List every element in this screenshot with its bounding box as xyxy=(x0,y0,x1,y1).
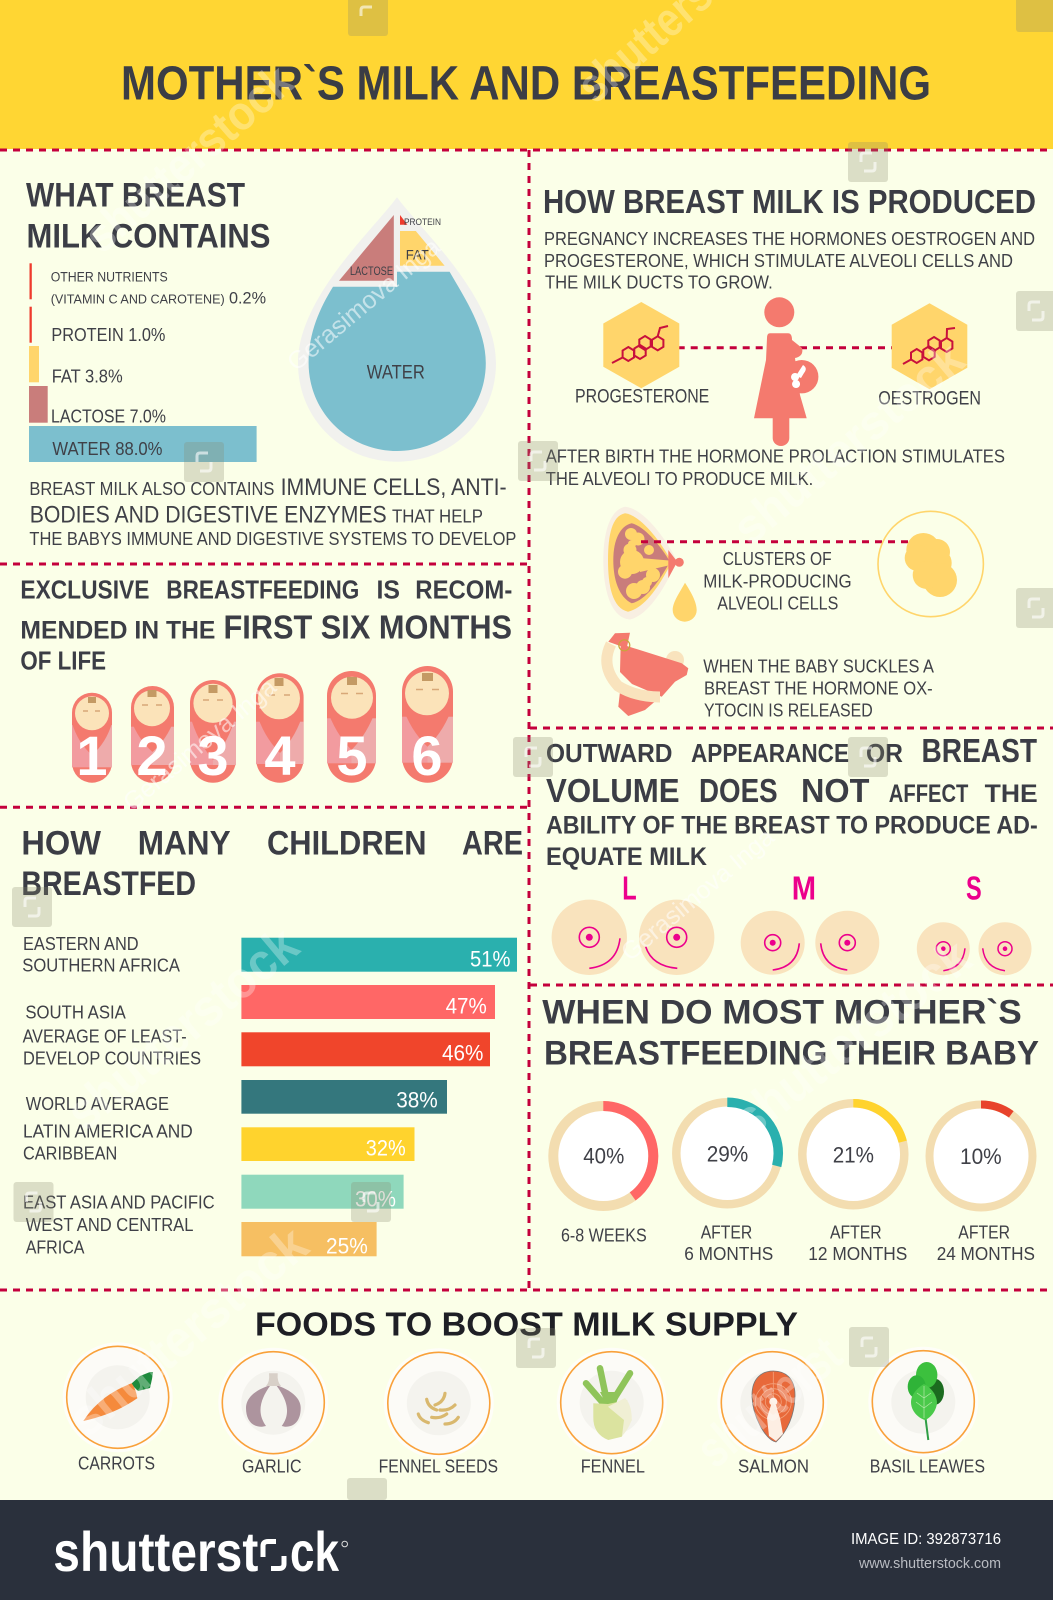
region labels: EASTERN AND xyxy=(23,934,139,954)
icon: fennel seeds: FENNEL SEEDS xyxy=(379,1457,498,1477)
watermark overlay: Gerasimova Inga xyxy=(282,233,446,377)
text block: prolactin: THE ALVEOLI TO PRODUCE MILK. xyxy=(546,468,813,489)
watermark overlay: shutterstock xyxy=(57,1215,319,1448)
icon: baby month 4 xyxy=(256,673,304,787)
heading: outward appearance: VOLUME xyxy=(546,772,680,809)
panel: when do most mothers breastfeed xyxy=(542,993,1039,1264)
donut: 29%: 29% xyxy=(707,1142,748,1167)
panel: breast volume xyxy=(546,732,1038,975)
bar chart: composition: LACTOSE 7.0% xyxy=(51,406,166,426)
donut: 21% xyxy=(802,1103,907,1264)
heading: when do most mothers xyxy=(542,993,1039,1072)
heading: outward appearance: APPEARANCE xyxy=(691,738,849,768)
icon: pregnant woman xyxy=(754,297,818,446)
heading: foods: FOODS TO BOOST MILK SUPPLY xyxy=(255,1306,798,1343)
text block: clusters of alveoli cells: CLUSTERS OF xyxy=(723,548,832,569)
donut: 10% xyxy=(930,1104,1035,1264)
text block: clusters of alveoli cells: MILK-PRODUCING xyxy=(703,570,852,591)
region labels: LATIN AMERICA AND xyxy=(23,1122,193,1142)
heading: when do most mothers: WHEN DO MOST MOTHER`S xyxy=(542,993,1022,1031)
donut: 10%: 24 MONTHS xyxy=(937,1244,1035,1264)
icon: breast cross-section with drop xyxy=(603,507,697,622)
heading: exclusive breastfeeding: MENDED IN THE xyxy=(20,616,215,644)
donut: 40% xyxy=(553,1106,653,1246)
bar chart: breastfed children: 38% xyxy=(396,1087,438,1112)
watermark overlay: shutterstock xyxy=(55,916,310,1142)
donut: 29%: 6 MONTHS xyxy=(684,1244,773,1264)
region labels: EAST ASIA AND PACIFIC xyxy=(23,1192,215,1212)
heading: what breast milk contains: MILK CONTAINS xyxy=(26,217,270,255)
size M xyxy=(741,869,879,975)
icon: carrots xyxy=(63,1342,173,1473)
icon: baby month 4: 4 xyxy=(264,724,296,787)
text block: oxytocin: YTOCIN IS RELEASED xyxy=(704,700,873,721)
text block: pregnancy hormones: THE MILK DUCTS TO GROW. xyxy=(545,271,773,292)
donut: 21%: 21% xyxy=(833,1143,874,1168)
donut: 10%: AFTER xyxy=(958,1222,1010,1242)
text block: immune cells note: THE BABYS IMMUNE AND DIGESTIVE SYSTEMS TO DEVELOP xyxy=(29,528,516,549)
watermark overlay: Gerasimova Inga xyxy=(118,673,282,817)
icon: basil xyxy=(868,1347,985,1477)
heading: outward appearance: THE xyxy=(985,780,1038,808)
heading: how many children: ARE xyxy=(462,824,523,862)
heading: how many children xyxy=(21,824,523,903)
chart: milk drop xyxy=(298,197,496,462)
bar chart: composition: 0.2% xyxy=(229,288,266,307)
text block: pregnancy hormones: PROGESTERONE, WHICH STIMULATE ALVEOLI CELLS AND xyxy=(544,250,1013,271)
panel: how breast milk is produced xyxy=(543,183,1036,721)
heading: outward appearance: OUTWARD xyxy=(546,738,672,768)
icon: progesterone hexagon xyxy=(603,302,679,388)
region labels: CARIBBEAN xyxy=(23,1143,117,1163)
text block: clusters of alveoli cells: ALVEOLI CELLS xyxy=(717,592,838,613)
icon: alveoli cluster xyxy=(878,511,983,617)
icon: salmon xyxy=(717,1348,827,1477)
heading: outward appearance: DOES xyxy=(699,772,778,809)
icon: baby month 6 xyxy=(402,666,453,787)
hormone labels: OESTROGEN xyxy=(878,388,981,409)
region labels: SOUTH ASIA xyxy=(25,1002,126,1022)
heading: exclusive breastfeeding: BREASTFEEDING xyxy=(166,574,359,604)
hormone labels: PROGESTERONE xyxy=(575,387,709,408)
icon: baby month 5 xyxy=(327,671,376,787)
panel: how many children are breastfed xyxy=(21,824,523,1258)
donut: 10%: 10% xyxy=(960,1144,1002,1169)
region labels: AVERAGE OF LEAST- xyxy=(23,1027,187,1047)
icon: garlic xyxy=(218,1348,328,1477)
icon: garlic: GARLIC xyxy=(242,1457,302,1477)
watermark overlay: shutterstock xyxy=(723,332,975,555)
header banner xyxy=(0,0,1053,149)
bar chart: composition xyxy=(29,263,266,462)
heading: exclusive breastfeeding: EXCLUSIVE xyxy=(20,574,149,604)
text block: prolactin xyxy=(546,446,1005,489)
panel: exclusive breastfeeding xyxy=(20,574,512,787)
heading: how many children: HOW xyxy=(21,824,102,862)
chart: milk drop: LACTOSE xyxy=(350,264,393,278)
icon: suckling breast xyxy=(607,633,688,716)
website: www.shutterstock.com xyxy=(858,1556,1001,1572)
footer logo: ck xyxy=(290,1520,340,1583)
heading: how many children: BREASTFED xyxy=(21,865,196,903)
heading: outward appearance: NOT xyxy=(801,772,869,809)
watermark overlay: shutterst xyxy=(685,1325,853,1479)
icon: baby month 5: 5 xyxy=(336,724,368,787)
bar chart: breastfed children: 32% xyxy=(366,1136,406,1161)
footer bar xyxy=(0,1500,1053,1600)
heading: what breast milk contains: WHAT BREAST xyxy=(26,177,245,215)
region labels: AFRICA xyxy=(26,1237,84,1257)
text block: clusters of alveoli cells xyxy=(703,548,852,613)
icon: baby month 1: 1 xyxy=(76,724,108,787)
heading: outward appearance: AFFECT xyxy=(889,780,968,808)
chart: milk drop: FAT xyxy=(406,246,429,262)
text block: oxytocin xyxy=(703,656,935,721)
heading: outward appearance xyxy=(546,732,1038,871)
text block: immune cells note: BREAST MILK ALSO CONTAINS xyxy=(29,479,274,499)
icon: baby month 2 xyxy=(131,686,174,787)
heading: outward appearance: EQUATE MILK xyxy=(546,843,707,871)
donut: 21%: 12 MONTHS xyxy=(808,1244,907,1264)
text block: immune cells note xyxy=(29,474,516,549)
heading: what breast milk contains xyxy=(26,177,270,255)
bar chart: breastfed children xyxy=(241,938,517,1258)
bar chart: breastfed children: 46% xyxy=(442,1041,483,1066)
text block: oxytocin: BREAST THE HORMONE OX- xyxy=(704,677,933,698)
image id: IMAGE ID: 392873716 xyxy=(851,1531,1001,1548)
donut: 40%: 6-8 WEEKS xyxy=(561,1226,647,1246)
chart: milk drop: WATER xyxy=(367,362,425,383)
icon: baby month 2: 2 xyxy=(136,724,168,787)
footer logo: shutterst xyxy=(53,1520,258,1583)
heading: exclusive breastfeeding: FIRST SIX MONTHS xyxy=(224,608,512,646)
icon: salmon: SALMON xyxy=(738,1457,809,1477)
bar chart: composition: WATER 88.0% xyxy=(52,439,162,459)
region labels: DEVELOP COUNTRIES xyxy=(23,1048,201,1068)
icon: carrots: CARROTS xyxy=(78,1453,155,1473)
size S: S xyxy=(966,869,982,906)
chart: milk drop: PROTEIN xyxy=(404,217,441,227)
text block: pregnancy hormones xyxy=(544,228,1035,292)
text block: immune cells note: BODIES AND DIGESTIVE ENZYMES xyxy=(30,502,387,529)
donut: 29%: AFTER xyxy=(701,1222,752,1242)
bar chart: breastfed children: 51% xyxy=(470,947,510,972)
watermark overlay: shutterstock xyxy=(722,928,982,1149)
heading: exclusive breastfeeding xyxy=(20,574,512,675)
size M: M xyxy=(792,869,816,906)
donut: 29% xyxy=(676,1102,778,1264)
region labels: WORLD AVERAGE xyxy=(26,1094,169,1114)
donut: 21%: AFTER xyxy=(830,1222,882,1242)
icon: baby month 6: 6 xyxy=(411,724,443,787)
panel: what breast milk contains xyxy=(26,177,516,549)
icon: baby month 1 xyxy=(72,693,112,787)
heading: when do most mothers: BREASTFEEDING THEIR BABY xyxy=(544,1034,1039,1072)
icon: oestrogen hexagon xyxy=(892,303,967,389)
region labels: WEST AND CENTRAL xyxy=(26,1215,193,1235)
heading: how many children: MANY xyxy=(138,824,231,862)
text block: prolactin: AFTER BIRTH THE HORMONE PROLACTION STIMULATES xyxy=(546,446,1005,467)
icon: fennel xyxy=(557,1348,667,1477)
icon: baby month 3 xyxy=(190,680,236,787)
bar chart: composition: OTHER NUTRIENTS xyxy=(51,270,168,285)
size S xyxy=(917,869,1032,975)
watermark overlay: Gerasimova Inga xyxy=(616,823,780,967)
bar chart: breastfed children: 47% xyxy=(446,993,487,1018)
text block: immune cells note: IMMUNE CELLS, ANTI- xyxy=(281,474,507,501)
region labels xyxy=(22,934,215,1257)
bar chart: composition: PROTEIN 1.0% xyxy=(51,325,165,345)
watermark overlay: shutterstock xyxy=(74,55,303,263)
icon: baby month 3: 3 xyxy=(197,724,229,787)
title: MOTHER`S MILK AND BREASTFEEDING xyxy=(121,57,931,110)
text block: immune cells note: THAT HELP xyxy=(392,507,483,527)
bar chart: composition: (VITAMIN C AND CAROTENE) xyxy=(51,291,225,306)
heading: exclusive breastfeeding: IS xyxy=(376,574,400,604)
donut: 40%: 40% xyxy=(583,1143,624,1168)
icon: fennel seeds xyxy=(379,1348,498,1477)
icon: fennel: FENNEL xyxy=(581,1457,645,1477)
size L: L xyxy=(622,869,637,906)
size L xyxy=(552,869,714,975)
bar chart: breastfed children: 25% xyxy=(326,1233,368,1258)
heading: outward appearance: OR xyxy=(866,738,903,768)
hormone labels xyxy=(575,387,981,409)
bar chart: breastfed children: 30% xyxy=(355,1187,396,1212)
icon: basil: BASIL LEAWES xyxy=(870,1457,985,1477)
heading: exclusive breastfeeding: OF LIFE xyxy=(20,645,106,675)
text block: oxytocin: WHEN THE BABY SUCKLES A xyxy=(703,656,935,677)
heading: exclusive breastfeeding: RECOM- xyxy=(415,574,512,604)
heading: how many children: CHILDREN xyxy=(267,824,426,862)
panel: foods to boost milk supply xyxy=(63,1306,985,1477)
region labels: SOUTHERN AFRICA xyxy=(22,956,180,976)
bar chart: composition: FAT 3.8% xyxy=(52,366,123,386)
